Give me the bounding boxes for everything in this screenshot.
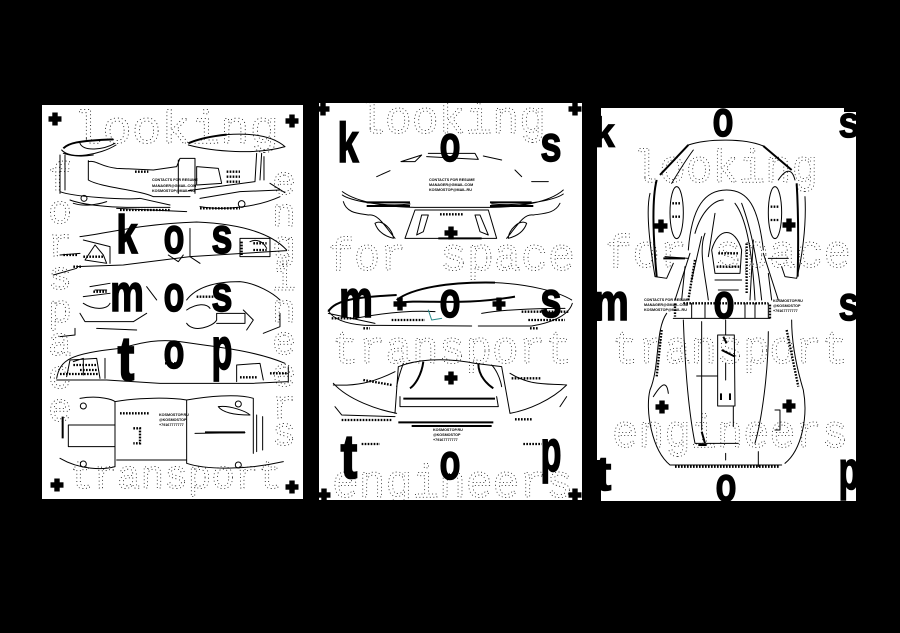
panel: poster 3 top-down car view: [593, 92, 860, 511]
dotted headline words: [328, 95, 575, 511]
contact details text block: +79167777777: [433, 438, 458, 442]
big letters kos mos top: t: [341, 422, 358, 491]
contact details text block: @KOSMOSTOP: [433, 433, 461, 437]
front car view: [342, 153, 572, 300]
dotted headline words: space: [440, 232, 575, 284]
dotted headline words: [48, 105, 296, 501]
top-down car, front half: [648, 140, 805, 300]
contact text block: [644, 298, 690, 312]
dotted headline words: looking: [73, 105, 279, 157]
contact text block: [429, 178, 475, 192]
contact text block: KOSMOSTOP@MAIL.RU: [152, 189, 195, 193]
panel: poster 2 front, side and rear car views: [316, 95, 582, 511]
top-down car, rear half: [648, 303, 805, 467]
dotted headline words: looking: [633, 144, 818, 196]
big letters kos mos top: m: [110, 264, 144, 322]
contact details text block: [433, 428, 463, 442]
contact text block: MANAGER@GMAIL.COM: [152, 184, 196, 188]
contact text block: CONTACTS FOR RESUME: [152, 178, 198, 182]
contact text block: MANAGER@GMAIL.COM: [644, 303, 688, 307]
panel: poster 1 horizontal car sections: [42, 105, 303, 501]
big letters kos mos top: o: [440, 117, 460, 173]
big letters kos mos top: [337, 113, 562, 491]
big letters kos mos top: p: [839, 440, 859, 501]
big letters kos mos top: o: [164, 267, 184, 323]
poster 2 sheet: [319, 103, 582, 500]
rear car view: [333, 360, 567, 444]
side car view: [328, 295, 572, 328]
poster 3 sheet: [597, 108, 856, 501]
big letters kos mos top: k: [337, 113, 359, 175]
poster 1 sheet: [42, 105, 303, 499]
plus marks: [654, 218, 796, 414]
big letters kos mos top: k: [593, 110, 615, 156]
contact details text block: +79167777777: [159, 423, 184, 427]
dotted headline words: looking: [358, 95, 546, 147]
dotted headline words: transport: [332, 325, 572, 377]
big letters kos mos top: o: [164, 209, 184, 265]
big letters kos mos top: s: [211, 267, 233, 322]
dotted headline words: transport: [70, 456, 282, 501]
big letters kos mos top: p: [541, 420, 561, 484]
dotted headline words: engineers: [612, 409, 848, 461]
car section drawings, lower: [57, 303, 288, 469]
plus marks: [48, 112, 298, 494]
big letters kos mos top: s: [540, 117, 562, 172]
big letters kos mos top: o: [716, 457, 736, 511]
big letters kos mos top: p: [212, 318, 232, 382]
big letters kos mos top: o: [440, 435, 460, 491]
big letters kos mos top: s: [838, 97, 860, 147]
contact text block: MANAGER@GMAIL.COM: [429, 183, 473, 187]
contact details text block: +79167777777: [773, 309, 798, 313]
dotted headline words: [605, 144, 851, 461]
contact details text block: [773, 299, 803, 313]
dotted headline words: forspace: [48, 158, 72, 434]
contact text block: KOSMOSTOP@MAIL.RU: [429, 188, 472, 192]
big letters kos mos top: [110, 204, 233, 393]
big letters kos mos top: m: [339, 270, 373, 328]
contact details text block: KOSMOSTOP.RU: [773, 299, 803, 303]
big letters kos mos top: k: [116, 204, 138, 265]
dotted headline words: engineers: [332, 459, 573, 511]
big letters kos mos top: s: [211, 209, 233, 264]
dotted headline words: for: [328, 232, 406, 284]
contact details text block: @KOSMOSTOP: [159, 418, 187, 422]
contact details text block: KOSMOSTOP.RU: [159, 413, 189, 417]
dotted headline words: engineers: [272, 162, 296, 458]
big letters kos mos top: m: [593, 273, 629, 331]
plus marks: [316, 102, 582, 502]
big letters kos mos top: s: [540, 273, 562, 328]
dotted headline words: transport: [612, 325, 848, 377]
contact text block: CONTACTS FOR RESUME: [429, 178, 475, 182]
contact details text block: [159, 413, 189, 427]
contact details text block: @KOSMOSTOP: [773, 304, 801, 308]
big letters kos mos top: o: [164, 324, 184, 380]
big letters kos mos top: o: [714, 274, 734, 328]
big letters kos mos top: s: [838, 278, 860, 331]
contact text block: CONTACTS FOR RESUME: [644, 298, 690, 302]
big letters kos mos top: o: [713, 92, 733, 148]
car section drawings, upper: [53, 134, 287, 300]
edge notches: [595, 105, 858, 503]
contact details text block: KOSMOSTOP.RU: [433, 428, 463, 432]
dotted headline words: for space: [605, 229, 851, 281]
big letters kos mos top: t: [595, 448, 611, 501]
big letters kos mos top: t: [118, 324, 135, 393]
big letters kos mos top: [593, 92, 860, 511]
contact text block: KOSMOSTOP@MAIL.RU: [644, 308, 687, 312]
big letters kos mos top: o: [440, 273, 460, 329]
contact text block: [152, 178, 198, 193]
